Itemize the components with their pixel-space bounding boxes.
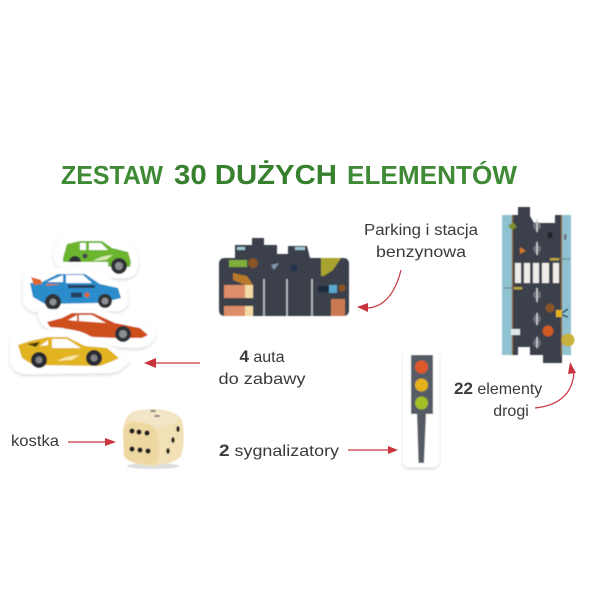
label: Parking i stacja benzynowa: benzynowa bbox=[376, 244, 466, 261]
arrow: to parking bbox=[357, 270, 401, 312]
arrow: to dice bbox=[68, 438, 116, 446]
blue car bbox=[23, 266, 128, 313]
label: 4 auta do zabawy: 4 auta bbox=[239, 347, 285, 366]
label: 22 elementy drogi bbox=[454, 379, 542, 420]
icon: wooden dice bbox=[123, 409, 184, 469]
label: 4 auta do zabawy bbox=[218, 347, 306, 388]
arrow: to traffic light bbox=[348, 446, 398, 454]
orange car bbox=[38, 309, 155, 348]
title bbox=[61, 159, 517, 190]
icon: traffic light bbox=[403, 350, 439, 467]
label: 22 elementy drogi: drogi bbox=[493, 403, 529, 420]
arrow: to road piece bbox=[535, 362, 576, 408]
title: ZESTAW bbox=[61, 160, 163, 190]
label: 4 auta do zabawy: do zabawy bbox=[218, 371, 306, 388]
panel: parking and gas station piece bbox=[219, 238, 349, 316]
label: 2 sygnalizatory: 2 sygnalizatory bbox=[219, 441, 339, 460]
panel: four toy cars bbox=[10, 232, 155, 374]
label: kostka: kostka bbox=[11, 433, 59, 450]
panel: road piece with crossing bbox=[502, 207, 574, 363]
label: Parking i stacja benzynowa: Parking i stacja bbox=[364, 222, 478, 239]
title: ELEMENTÓW bbox=[347, 160, 517, 190]
title: 30 DUŻYCH bbox=[174, 159, 337, 190]
green car bbox=[54, 232, 138, 278]
label: Parking i stacja benzynowa bbox=[364, 222, 478, 261]
yellow car bbox=[10, 329, 130, 374]
arrow: to cars bbox=[144, 358, 200, 368]
label: 22 elementy drogi: 22 elementy bbox=[454, 379, 542, 398]
